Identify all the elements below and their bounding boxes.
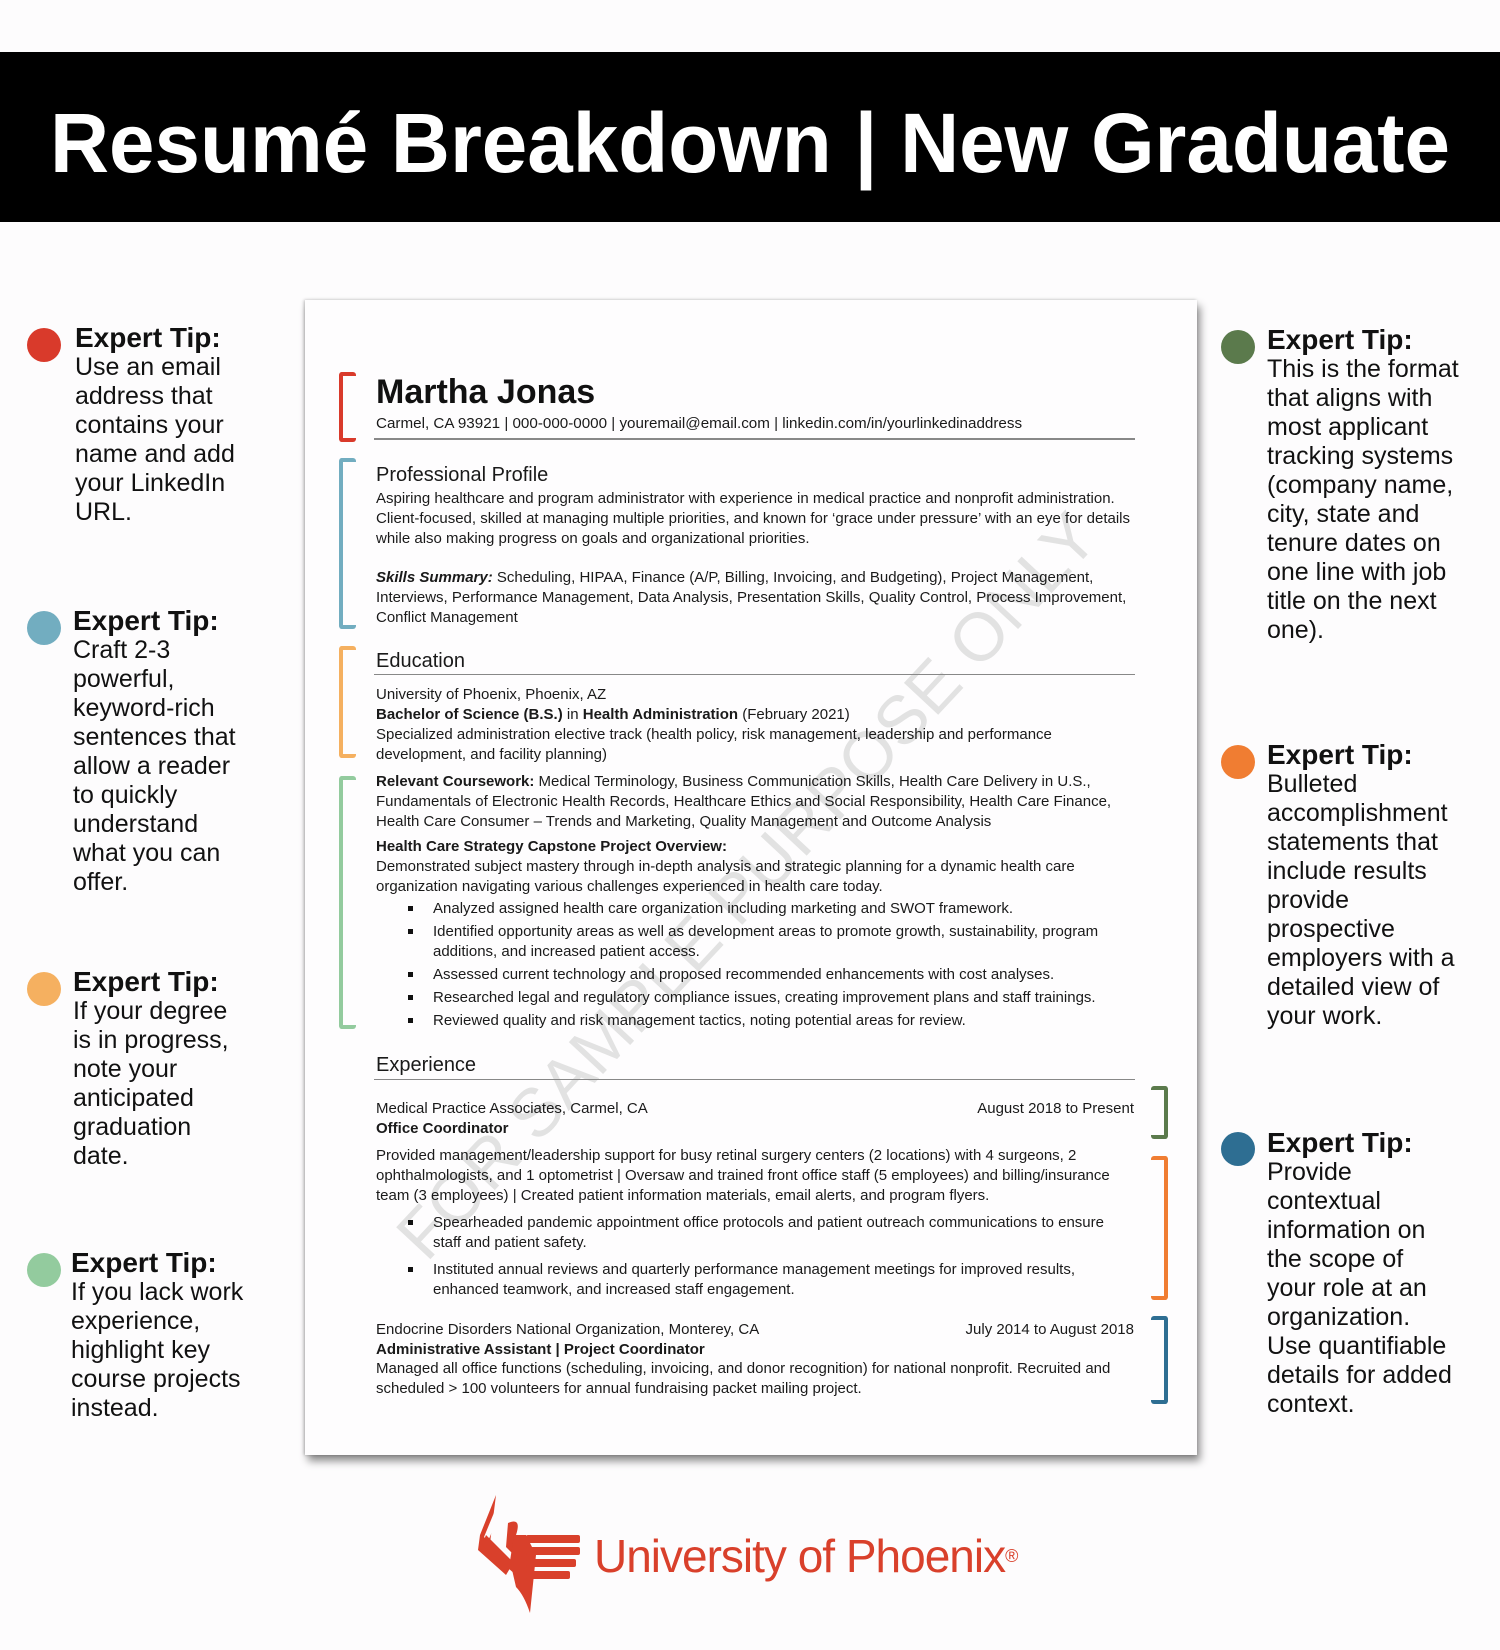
section: experience: Medical Practice Associates, Carmel, CA [376, 1100, 648, 1117]
tip: coursework (green): highlight key [71, 1336, 210, 1364]
resume header: name & contact [376, 373, 1022, 432]
tip: email (red): name and add [75, 440, 235, 468]
section: experience: Instituted annual reviews and quarterly performance management meetings for improved results, [433, 1261, 1075, 1278]
tip: profile (blue): powerful, [73, 665, 174, 693]
tip: email (red): your LinkedIn [75, 469, 225, 497]
watermark: FOR SAMPLE PURPOSE ONLY [382, 499, 1112, 1273]
tip: bullets (orange) [1221, 739, 1455, 1030]
tip: profile (blue): sentences that [73, 723, 236, 751]
section: experience: ophthalmologists, and 1 optometrist | Oversaw and trained front office staff (5 employees) and billing/insurance [376, 1167, 1110, 1184]
tip: bullets (orange): prospective [1267, 915, 1395, 943]
tip: format (dark green): This is the format [1267, 355, 1459, 383]
section: experience: Office Coordinator [376, 1120, 509, 1137]
tip: format (dark green): most applicant [1267, 413, 1428, 441]
tip: degree (orange): date. [73, 1142, 129, 1170]
section: education: Health Care Strategy Capstone Project Overview: [376, 838, 727, 855]
icon: phoenix [478, 1495, 580, 1613]
section: education: Identified opportunity areas as well as development areas to promote growth, sustainability, program [433, 923, 1098, 940]
tip: email (red): Use an email [75, 353, 221, 381]
tip: bullets (orange): include results [1267, 857, 1427, 885]
tip: format (dark green): that aligns with [1267, 384, 1432, 412]
tip: degree (orange) [27, 966, 229, 1170]
section: experience: Managed all office functions (scheduling, invoicing, and donor recognition) for national nonprofit. Recruited and [376, 1360, 1110, 1377]
section: experience [376, 1054, 1134, 1397]
section: education: Assessed current technology and proposed recommended enhancements with cost analyses. [433, 966, 1054, 983]
tip: scope (dark blue): organization. [1267, 1303, 1410, 1331]
section: experience: Administrative Assistant | Project Coordinator [376, 1341, 705, 1358]
section: education: additions, and increased patient access. [433, 943, 700, 960]
tip: scope (dark blue): details for added [1267, 1361, 1452, 1389]
section: education: University of Phoenix, Phoenix, AZ [376, 686, 606, 703]
section: education: Relevant Coursework: Medical Terminology, Business Communication Skills, Health Care Delivery in U.S., [376, 773, 1091, 790]
tip: profile (blue): understand [73, 810, 198, 838]
brackets right [1151, 1086, 1168, 1139]
tip: degree (orange): graduation [73, 1113, 191, 1141]
brackets left [339, 372, 356, 442]
section: professional profile: Client-focused, skilled at managing multiple priorities, and known for ‘grace under pressure’ with an eye for details [376, 510, 1130, 527]
tip: scope (dark blue): context. [1267, 1390, 1355, 1418]
tip: coursework (green): If you lack work [71, 1278, 243, 1306]
tip: coursework (green) [27, 1247, 244, 1422]
section: professional profile [376, 464, 1130, 626]
tip: scope (dark blue): the scope of [1267, 1245, 1403, 1273]
tip: degree (orange): If your degree [73, 997, 227, 1025]
resume header: name & contact: Martha Jonas [376, 373, 595, 411]
section: education [376, 650, 1111, 1029]
section: experience: scheduled > 100 volunteers for annual fundraising packet mailing project. [376, 1380, 862, 1397]
tip: profile (blue): keyword-rich [73, 694, 215, 722]
tip: degree (orange): Expert Tip: [73, 966, 219, 997]
section: education: Fundamentals of Electronic Health Records, Healthcare Ethics and Social Responsibility, Health Care Finance, [376, 793, 1111, 810]
tip: format (dark green): tenure dates on [1267, 529, 1441, 557]
tip: format (dark green): one line with job [1267, 558, 1446, 586]
section: education: Health Care Consumer – Trends and Marketing, Quality Management and Outcome Analysis [376, 813, 991, 830]
tip: format (dark green): city, state and [1267, 500, 1419, 528]
tip: scope (dark blue): your role at an [1267, 1274, 1427, 1302]
tip: scope (dark blue): contextual [1267, 1187, 1381, 1215]
tip: email (red): contains your [75, 411, 224, 439]
section: experience: Provided management/leadership support for busy retinal surgery centers (2 locations) with 4 surgeons, 2 [376, 1147, 1076, 1164]
tip: bullets (orange): your work. [1267, 1002, 1382, 1030]
tip: format (dark green): one). [1267, 616, 1324, 644]
title banner: Resumé Breakdown | New Graduate [50, 96, 1450, 191]
tip: coursework (green): course projects [71, 1365, 241, 1393]
section: education: Reviewed quality and risk management tactics, noting potential areas for review. [433, 1012, 966, 1029]
tip: profile (blue): Craft 2-3 [73, 636, 170, 664]
tip: scope (dark blue): information on [1267, 1216, 1425, 1244]
resume paper [305, 300, 1197, 1455]
tip: bullets (orange): Expert Tip: [1267, 739, 1413, 770]
section: professional profile: Conflict Management [376, 609, 518, 626]
tip: scope (dark blue) [1221, 1127, 1452, 1418]
section: professional profile: Aspiring healthcare and program administrator with experience in medical practice and nonprofit administration. [376, 490, 1115, 507]
tip: bullets (orange): detailed view of [1267, 973, 1439, 1001]
title banner [0, 52, 1500, 222]
tip: format (dark green): title on the next [1267, 587, 1437, 615]
tip: profile (blue): to quickly [73, 781, 177, 809]
tip: scope (dark blue): Provide [1267, 1158, 1352, 1186]
tip: bullets (orange): employers with a [1267, 944, 1455, 972]
tip: coursework (green): experience, [71, 1307, 200, 1335]
section: experience: Endocrine Disorders National Organization, Monterey, CA [376, 1321, 759, 1338]
section: experience: Experience [376, 1054, 476, 1076]
tip: format (dark green): tracking systems [1267, 442, 1453, 470]
tip: profile (blue): what you can [73, 839, 220, 867]
resume header: name & contact: Carmel, CA 93921 | 000-000-0000 | youremail@email.com | linkedin.com/in/yourlinkedinaddress [376, 415, 1022, 432]
tip: coursework (green): instead. [71, 1394, 159, 1422]
section: professional profile: Professional Profile [376, 464, 548, 486]
tip: email (red): URL. [75, 498, 132, 526]
section: education: Specialized administration elective track (health policy, risk management, leadership and performance [376, 726, 1052, 743]
section: experience: Spearheaded pandemic appointment office protocols and patient outreach communications to ensure [433, 1214, 1104, 1231]
section: experience: July 2014 to August 2018 [966, 1321, 1134, 1338]
tip: profile (blue): offer. [73, 868, 128, 896]
tip: scope (dark blue): Expert Tip: [1267, 1127, 1413, 1158]
section: experience: staff and patient safety. [433, 1234, 587, 1251]
tip: bullets (orange): accomplishment [1267, 799, 1448, 827]
section: professional profile: Skills Summary: Scheduling, HIPAA, Finance (A/P, Billing, Invoicing, and Budgeting), Project Management, [376, 569, 1093, 586]
logo text: University of Phoenix® [594, 1530, 1018, 1582]
tip: bullets (orange): Bulleted [1267, 770, 1357, 798]
section: education: Bachelor of Science (B.S.) in Health Administration (February 2021) [376, 706, 850, 723]
section: professional profile: Interviews, Performance Management, Data Analysis, Presentation Skills, Quality Control, Process Improvement, [376, 589, 1126, 606]
tip: format (dark green) [1221, 324, 1459, 644]
tip: profile (blue): allow a reader [73, 752, 230, 780]
tip: email (red): address that [75, 382, 213, 410]
section: education: Researched legal and regulatory compliance issues, creating improvement plans and staff trainings. [433, 989, 1096, 1006]
section: education: Analyzed assigned health care organization including marketing and SWOT framework. [433, 900, 1013, 917]
tip: profile (blue): Expert Tip: [73, 605, 219, 636]
tip: degree (orange): is in progress, [73, 1026, 229, 1054]
section: education: development, and facility planning) [376, 746, 607, 763]
tip: profile (blue) [27, 605, 236, 896]
tip: bullets (orange): statements that [1267, 828, 1438, 856]
tip: email (red): Expert Tip: [75, 322, 221, 353]
tip: email (red) [27, 322, 235, 526]
section: experience: team (3 employees) | Created patient information materials, email alerts, and program flyers. [376, 1187, 989, 1204]
tip: format (dark green): (company name, [1267, 471, 1453, 499]
section: education: Demonstrated subject mastery through in-depth analysis and strategic planning for a dynamic health care [376, 858, 1075, 875]
tip: degree (orange): anticipated [73, 1084, 194, 1112]
section: education: Education [376, 650, 465, 672]
section: professional profile: while also making progress on goals and organizational priorities. [376, 530, 810, 547]
section: experience: enhanced teamwork, and increased staff engagement. [433, 1281, 795, 1298]
logo: University of Phoenix [478, 1495, 1018, 1613]
tip: scope (dark blue): Use quantifiable [1267, 1332, 1446, 1360]
tip: bullets (orange): provide [1267, 886, 1349, 914]
section: education: organization navigating various challenges experienced in health care today. [376, 878, 883, 895]
section: experience: August 2018 to Present [977, 1100, 1134, 1117]
tip: degree (orange): note your [73, 1055, 177, 1083]
tip: coursework (green): Expert Tip: [71, 1247, 217, 1278]
tip: format (dark green): Expert Tip: [1267, 324, 1413, 355]
